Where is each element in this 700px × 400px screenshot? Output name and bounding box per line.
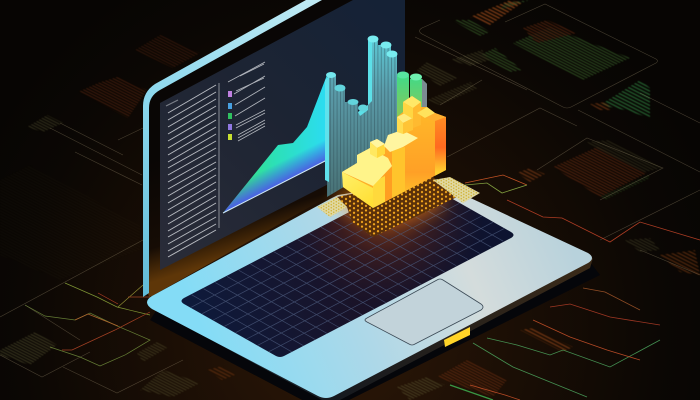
lid edge highlight — [143, 0, 322, 297]
screen legend — [228, 62, 265, 141]
gold face — [392, 147, 405, 198]
deck — [147, 180, 592, 398]
orange stripe — [385, 168, 392, 202]
laptop base — [147, 179, 600, 400]
dot matrix projection — [317, 177, 480, 237]
small cube — [370, 139, 385, 158]
flat top — [384, 130, 418, 152]
teal bars — [325, 36, 398, 197]
red side face — [435, 117, 446, 176]
background: line charts left — [25, 283, 150, 366]
left face — [342, 172, 373, 208]
background: line charts right — [450, 175, 700, 400]
tall cube — [403, 96, 421, 128]
mid cube — [397, 112, 413, 134]
screen — [160, 0, 405, 270]
right cube top — [417, 107, 435, 118]
yellow front face — [373, 176, 385, 208]
keyboard — [182, 179, 514, 357]
lid bezel — [148, 0, 405, 296]
silhouette — [342, 96, 446, 208]
cyan bar chart — [325, 36, 427, 197]
orange isometric blocks — [342, 96, 446, 208]
glow under blocks — [335, 178, 445, 222]
front tab light — [444, 327, 470, 347]
area chart — [223, 75, 327, 213]
base front edge — [148, 258, 593, 400]
trackpad — [365, 279, 483, 345]
large top — [342, 148, 392, 186]
screen text list — [166, 83, 219, 257]
laptop lid — [143, 0, 405, 297]
base shadow — [150, 262, 600, 400]
green back bars — [397, 72, 427, 155]
